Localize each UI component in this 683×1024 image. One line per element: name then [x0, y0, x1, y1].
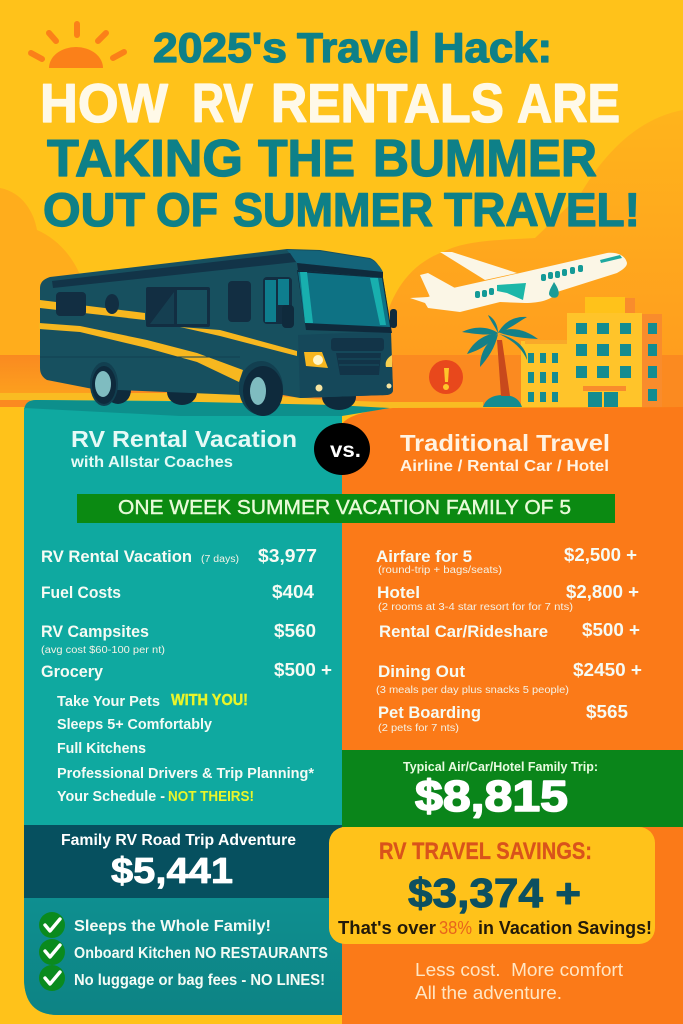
amount: 5,441: $5,441	[111, 850, 233, 891]
row: fuel: Fuel Costs	[41, 584, 121, 602]
benefit: pets: Take Your Pets	[57, 693, 160, 710]
check item: luggage	[39, 965, 325, 991]
badge: vs	[314, 423, 370, 475]
illustration: hotel buildings	[521, 297, 662, 407]
row: campsites: $560	[274, 620, 316, 641]
row: hotel: $2,800 +	[566, 581, 639, 602]
row: dining: (3 meals per day plus snacks 5 people)	[376, 685, 569, 696]
rear wheel	[90, 362, 118, 406]
heading: traditional travel: Traditional Travel	[400, 430, 610, 456]
row: RV rental	[41, 545, 317, 566]
total panel: RV trip	[24, 825, 342, 898]
title line: 2025's Travel Hack: 2025's	[153, 24, 287, 71]
illustration: RV motorhome	[39, 249, 397, 416]
row: pet boarding: (2 pets for 7 nts)	[378, 723, 459, 734]
row: campsites	[41, 620, 316, 656]
row: airfare: $2,500 +	[564, 544, 637, 565]
label: family RV road trip: Family RV Road Trip Adventure	[61, 832, 296, 849]
rear wheel back	[105, 376, 131, 404]
RV benefits list	[57, 692, 314, 805]
checklist	[39, 912, 328, 991]
row: dining: Dining Out	[378, 663, 466, 681]
row: hotel	[377, 581, 639, 613]
panel header: RV rental	[70, 426, 297, 471]
benefit: drivers: Professional Drivers & Trip Planning*	[57, 765, 314, 782]
label: typical trip: Typical Air/Car/Hotel Family Trip:	[403, 759, 598, 774]
title line: 2025's Travel Hack	[153, 24, 552, 71]
title line: how RV rentals are: RV	[192, 72, 253, 134]
check item: sleeps: Sleeps the Whole Family!	[74, 918, 271, 935]
row: grocery	[41, 659, 332, 681]
check item: kitchen: Onboard Kitchen NO RESTAURANTS	[74, 945, 328, 962]
total panel: traditional trip	[342, 750, 683, 827]
illustration: airplane	[410, 252, 627, 312]
roof strip	[52, 253, 296, 288]
row: dining	[376, 659, 642, 696]
row: pet boarding	[378, 701, 628, 734]
banner: one week summer vacation	[77, 494, 615, 523]
row: grocery: Grocery	[41, 663, 104, 681]
closing tagline	[415, 960, 623, 1003]
row: hotel: Hotel	[377, 584, 420, 602]
headlights	[304, 352, 328, 368]
bus body	[40, 249, 393, 398]
title line: how RV rentals are: RENTALS	[271, 72, 504, 134]
closing tagline: All the adventure.	[415, 983, 562, 1003]
title line: 2025's Travel Hack: Travel	[297, 24, 420, 71]
row: dining: $2450 +	[573, 659, 642, 680]
RV cost list	[41, 545, 332, 681]
benefit: pets	[57, 692, 248, 710]
title line: out of summer travel: OF	[156, 183, 218, 236]
row: pet boarding: $565	[586, 701, 628, 722]
benefit: kitchens: Full Kitchens	[57, 740, 146, 757]
closing tagline: Less cost. More comfort	[415, 960, 623, 980]
check item: kitchen	[39, 939, 328, 965]
subheading: airline rental car hotel: Airline / Rental Car / Hotel	[400, 458, 609, 475]
title line: how RV rentals are: HOW	[40, 72, 168, 134]
row: pet boarding: Pet Boarding	[378, 704, 481, 722]
grille	[331, 338, 384, 351]
check item: sleeps	[39, 912, 271, 938]
side windows	[56, 277, 292, 327]
panel header: traditional travel	[400, 430, 610, 475]
callout: RV travel savings	[329, 827, 655, 944]
title line: out of summer travel	[43, 183, 640, 236]
title line: 2025's Travel Hack: Hack:	[433, 24, 552, 71]
callout amount: $3,374 +	[408, 870, 581, 916]
callout note	[338, 918, 652, 938]
title line: out of summer travel: OUT	[43, 183, 145, 236]
row: airfare: Airfare for 5	[376, 548, 472, 566]
title line: taking the bummer: BUMMER	[373, 130, 597, 188]
panel: traditional travel orange	[342, 407, 683, 1024]
icon: sun	[31, 24, 124, 68]
row: hotel: (2 rooms at 3-4 star resort for for 7 nts)	[378, 602, 573, 613]
row: rental car	[379, 619, 640, 641]
title line: taking the bummer: TAKING	[47, 130, 243, 188]
row: campsites: RV Campsites	[41, 623, 149, 641]
illustration: palm tree	[462, 315, 538, 407]
benefit: pets: WITH YOU!	[171, 692, 248, 709]
row: RV rental: RV Rental Vacation	[41, 548, 192, 566]
heading: RV rental vacation: RV Rental Vacation	[71, 426, 297, 452]
callout heading: RV TRAVEL SAVINGS:	[379, 838, 592, 865]
yellow stripes	[40, 300, 145, 320]
row: rental car: Rental Car/Rideshare	[379, 623, 548, 641]
row: grocery: $500 +	[274, 659, 332, 680]
badge: vs: vs.	[330, 439, 361, 462]
title	[40, 24, 640, 236]
row: rental car: $500 +	[582, 619, 640, 640]
title line: taking the bummer	[47, 130, 597, 188]
row: RV rental: (7 days)	[201, 554, 239, 565]
callout note: 38%	[439, 918, 472, 938]
hidden wheels	[167, 379, 356, 410]
banner: one week summer vacation: ONE WEEK SUMMER VACATION FAMILY OF 5	[118, 497, 571, 519]
title line: taking the bummer: THE	[258, 130, 355, 188]
benefit: sleeps: Sleeps 5+ Comfortably	[57, 716, 213, 733]
row: airfare: (round-trip + bags/seats)	[378, 565, 502, 576]
callout note: in Vacation Savings!	[478, 918, 652, 938]
front wheel	[239, 361, 283, 416]
row: fuel: $404	[272, 581, 315, 602]
amount: 8,815: $8,815	[415, 772, 568, 821]
icon: warning circle	[429, 360, 463, 394]
benefit: schedule	[57, 788, 254, 805]
check item: luggage: No luggage or bag fees - NO LINES!	[74, 972, 325, 989]
title line: out of summer travel: TRAVEL!	[444, 183, 640, 236]
row: campsites: (avg cost $60-100 per nt)	[41, 645, 165, 656]
windshield	[297, 270, 392, 333]
title line: how RV rentals are	[40, 72, 620, 134]
callout note: That's over	[338, 918, 436, 938]
panel: RV rental teal	[24, 400, 390, 1015]
row: fuel	[41, 581, 315, 602]
title line: how RV rentals are: ARE	[517, 72, 620, 134]
benefit: schedule: Your Schedule -	[57, 788, 165, 805]
title line: out of summer travel: SUMMER	[233, 183, 433, 236]
benefit: schedule: NOT THEIRS!	[168, 788, 254, 805]
row: RV rental: $3,977	[258, 545, 317, 566]
subheading: with Allstar Coaches: with Allstar Coaches	[70, 454, 233, 471]
traditional cost list	[376, 544, 642, 734]
row: airfare	[376, 544, 637, 576]
